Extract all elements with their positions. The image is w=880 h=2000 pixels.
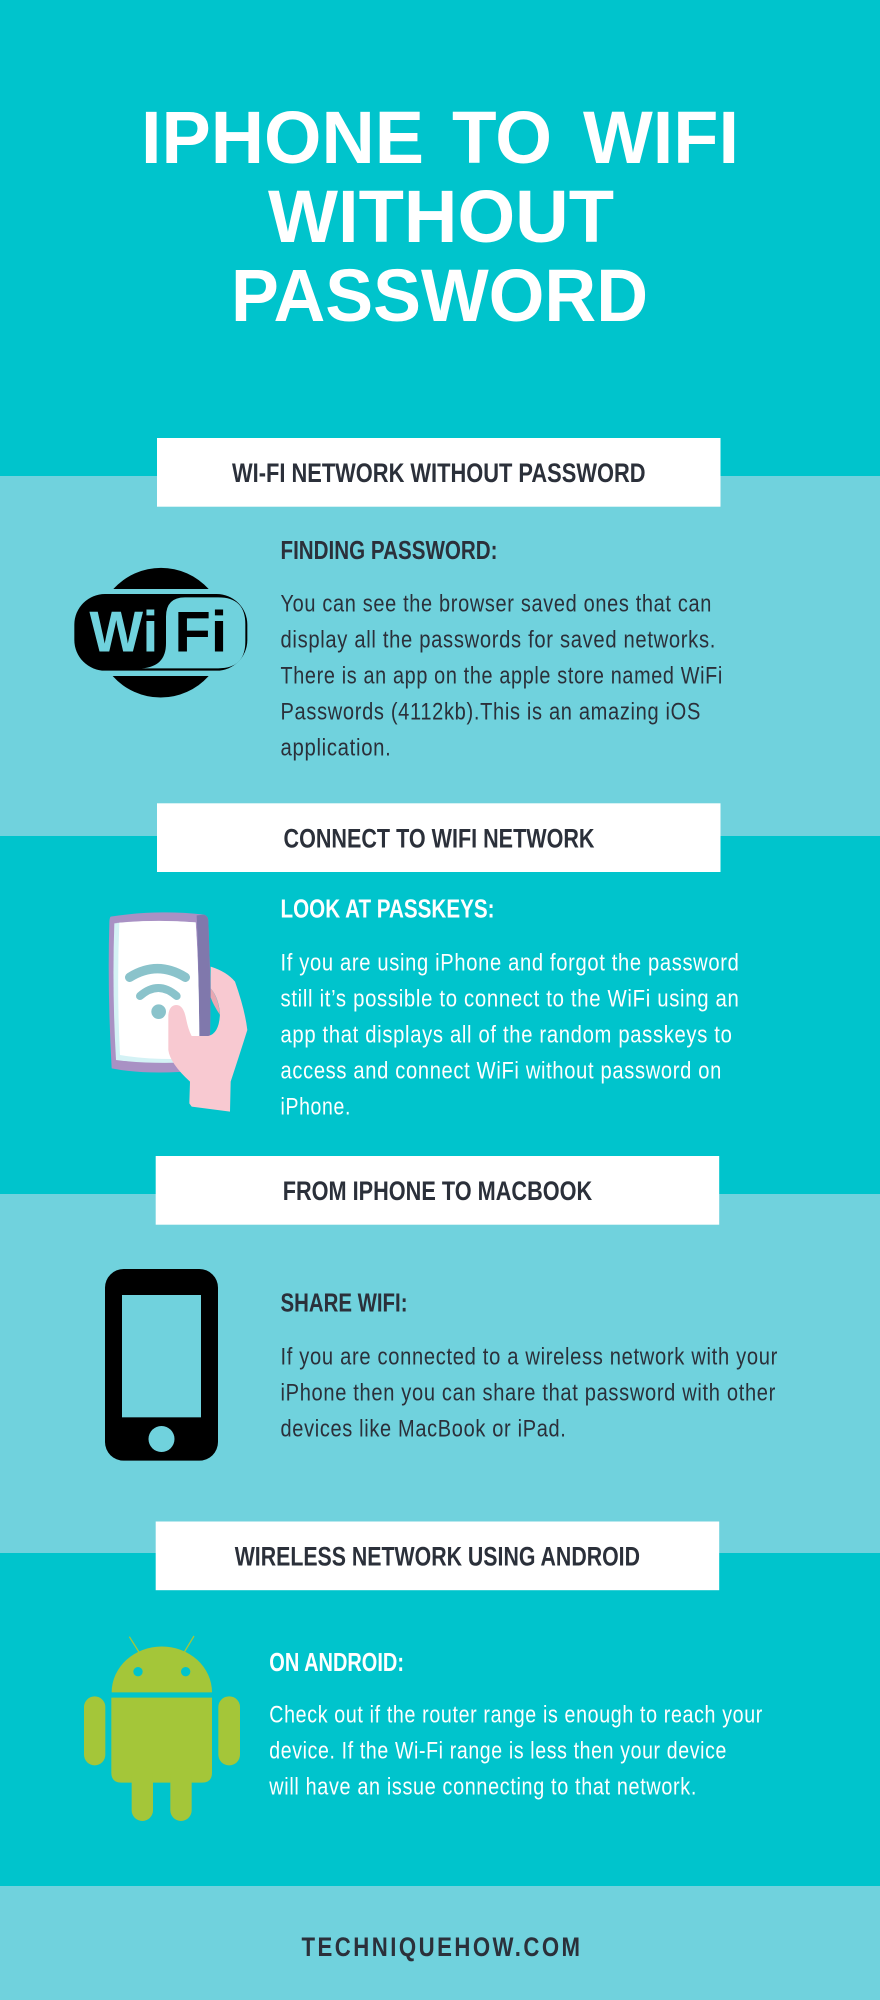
text block: on android [268, 1702, 763, 1800]
icon: android robot [84, 1636, 240, 1821]
icon: wifi logo: Fi [174, 601, 227, 665]
text block: finding password: display all the passwords for saved networks. [280, 626, 716, 654]
panel: on android [0, 1553, 880, 1886]
section header: connect to wifi network: CONNECT TO WIFI NETWORK [284, 823, 594, 853]
section header: connect to wifi network [157, 803, 720, 872]
section header: wireless network using android: WIRELESS NETWORK USING ANDROID [235, 1542, 640, 1572]
text block: share wifi: iPhone then you can share that password with other [280, 1380, 776, 1407]
heading: look at passkeys: LOOK AT PASSKEYS: [280, 894, 494, 924]
text block: share wifi: devices like MacBook or iPad. [280, 1416, 566, 1443]
text block: on android: device. If the Wi-Fi range is less then your device [269, 1738, 727, 1764]
title: IPHONE [141, 96, 424, 179]
icon: hand holding phone with wifi [109, 912, 247, 1112]
text block: share wifi [280, 1344, 778, 1443]
title: WITHOUT [268, 175, 614, 258]
text block: look at passkeys [280, 950, 740, 1121]
section header: from iphone to macbook [156, 1156, 719, 1225]
text block: on android: will have an issue connecting to that network. [268, 1773, 697, 1800]
section header: wi-fi network without password: WI-FI NETWORK WITHOUT PASSWORD [232, 458, 646, 488]
section header: wireless network using android [156, 1522, 719, 1590]
panel: finding password [0, 476, 880, 836]
icon: smartphone [105, 1269, 218, 1461]
text block: finding password [280, 591, 723, 762]
background: top title band [0, 0, 880, 476]
text block: look at passkeys: iPhone. [280, 1094, 351, 1121]
title [141, 96, 739, 337]
text block: finding password: There is an app on the apple store named WiFi [280, 662, 723, 690]
text block: finding password: Passwords (4112kb).This is an amazing iOS [280, 698, 701, 726]
title: PASSWORD [231, 254, 648, 337]
panel: share wifi [0, 1194, 880, 1553]
text block: finding password: You can see the browser saved ones that can [280, 591, 712, 618]
title: TO [452, 96, 552, 179]
text block: share wifi: If you are connected to a wireless network with your [280, 1344, 778, 1371]
title: WIFI [583, 96, 739, 179]
text block: finding password: application. [280, 734, 392, 762]
text block: look at passkeys: app that displays all of the random passkeys to [280, 1022, 732, 1049]
panel: footer [0, 1886, 880, 2000]
icon: wifi logo [74, 568, 247, 697]
text block: look at passkeys: If you are using iPhone and forgot the password [280, 950, 740, 977]
heading: share wifi: SHARE WIFI: [280, 1288, 408, 1318]
heading: on android: ON ANDROID: [269, 1647, 404, 1677]
text block: look at passkeys: still it’s possible to connect to the WiFi using an [280, 986, 740, 1013]
icon: wifi logo: Wi [89, 601, 158, 665]
text block: look at passkeys: access and connect WiFi without password on [280, 1058, 722, 1085]
section header: wi-fi network without password [157, 438, 720, 507]
panel: look at passkeys [0, 836, 880, 1194]
footer website text: TECHNIQUEHOW.COM [302, 1932, 582, 1962]
section header: from iphone to macbook: FROM IPHONE TO MACBOOK [283, 1176, 592, 1206]
heading: finding password: FINDING PASSWORD: [280, 535, 498, 565]
text block: on android: Check out if the router range is enough to reach your [269, 1702, 763, 1729]
